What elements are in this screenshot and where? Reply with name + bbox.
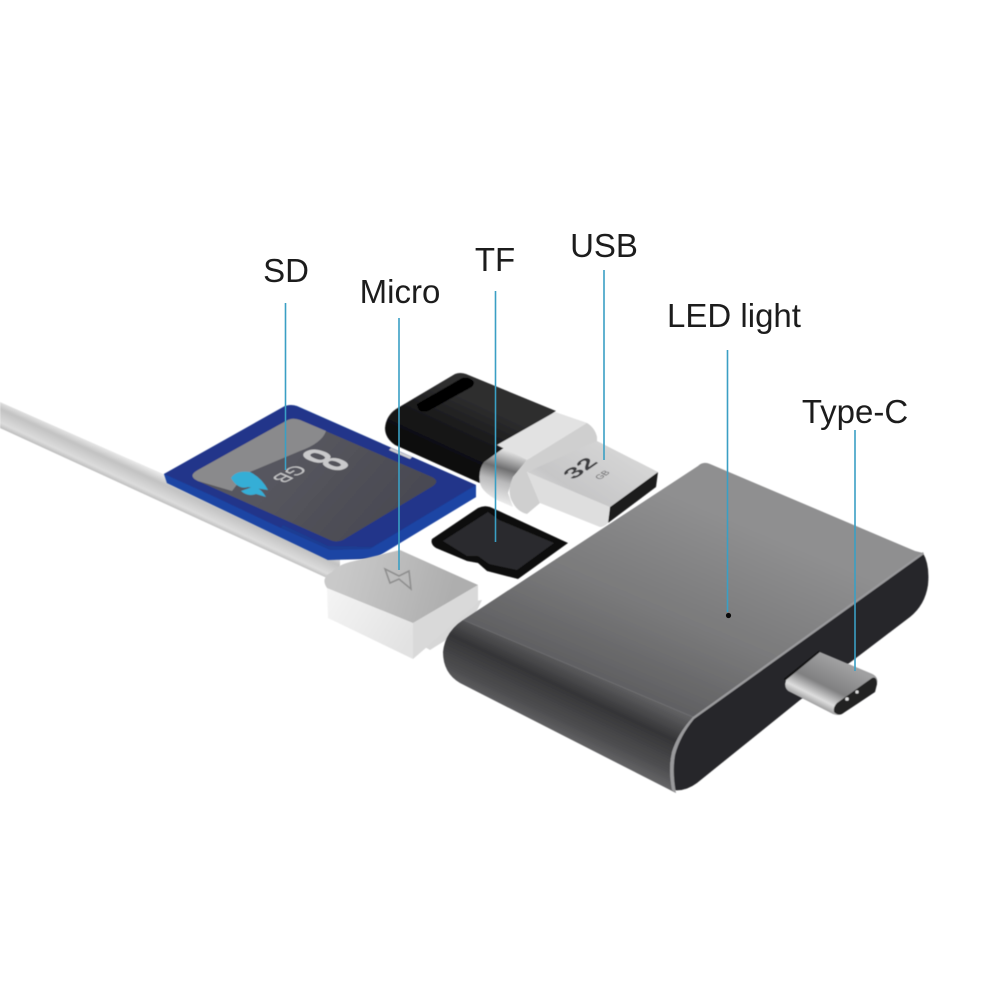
leader line: LED light	[726, 350, 728, 612]
label: Micro: Micro	[360, 273, 440, 310]
adapter black body	[385, 373, 556, 484]
icon: Micro USB plug	[324, 550, 482, 659]
label: LED light: LED light	[667, 297, 801, 334]
label: SD: SD	[263, 252, 309, 289]
icon: SD card	[164, 405, 476, 560]
hub front face	[443, 620, 693, 793]
label: USB: USB	[570, 227, 638, 264]
label: Type-C: Type-C	[802, 393, 908, 430]
SD capacity unit: GB	[266, 462, 311, 485]
plug top face	[527, 441, 658, 507]
adapter plug shoulder	[510, 423, 597, 514]
hub end face	[670, 553, 928, 790]
icon: Micro USB cable	[0, 402, 340, 584]
icon: USB-C plug	[785, 652, 877, 715]
leader line: Type-C	[854, 430, 856, 671]
icon: SD brand mark	[231, 472, 268, 497]
leader line: USB	[603, 270, 605, 460]
icon: USB adapter	[385, 373, 658, 527]
leader line: SD	[284, 303, 286, 470]
leader line: TF	[494, 291, 496, 542]
icon: TF card	[432, 506, 568, 579]
leader line: Micro	[398, 318, 400, 570]
icon: hub body	[443, 463, 928, 793]
adapter port slot	[417, 378, 474, 412]
SD capacity number: 8	[286, 441, 364, 478]
plug opening	[608, 472, 658, 523]
adapter metal band	[480, 412, 587, 507]
label: TF: TF	[475, 241, 515, 278]
plug front face	[527, 472, 610, 527]
icon: plug logo	[385, 569, 411, 589]
hub top face	[463, 463, 923, 717]
USB capacity number: 32	[558, 455, 604, 482]
icon: LED light dot	[726, 613, 731, 618]
USB capacity unit: GB	[593, 469, 612, 481]
